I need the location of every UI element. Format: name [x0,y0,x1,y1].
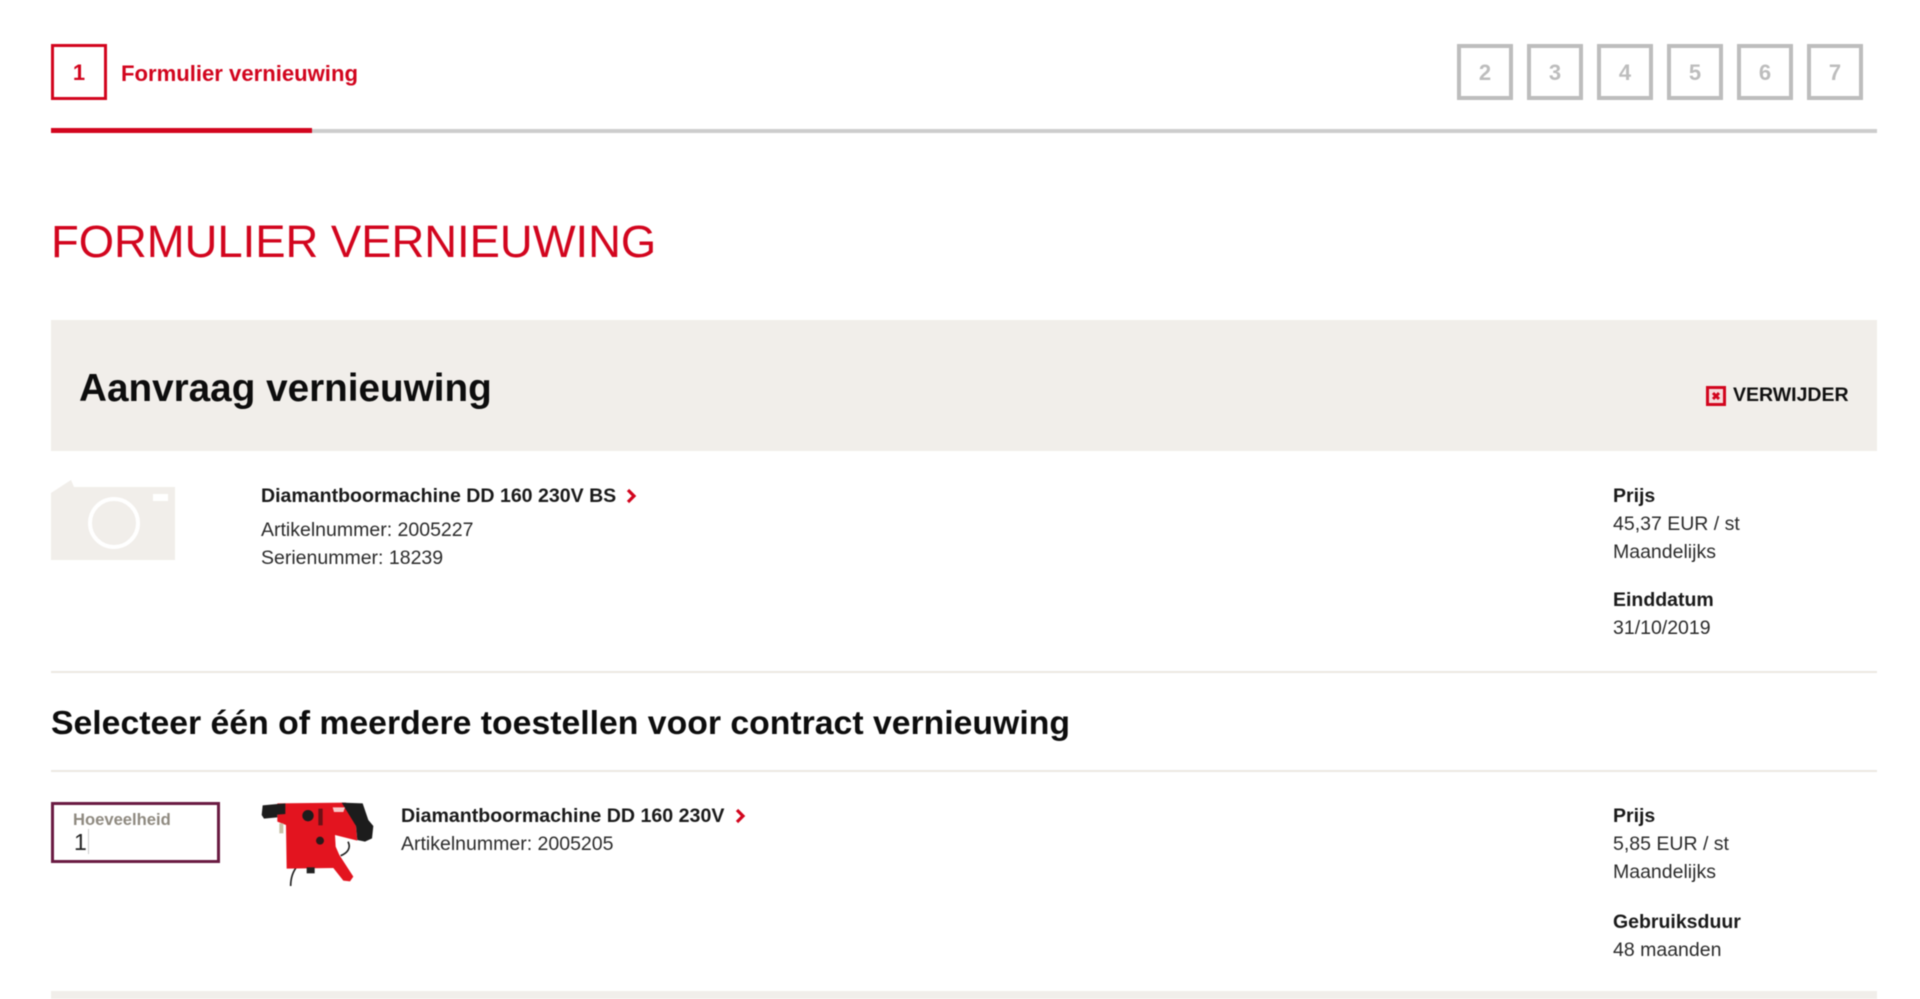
price label: Prijs [1613,805,1655,827]
progress track [51,129,1877,133]
page title: FORMULIER VERNIEUWING [51,216,656,267]
logo [333,807,345,812]
icon: chevron [735,808,746,824]
step 6 [1737,44,1793,100]
active step box [51,44,107,100]
usage period value: 48 maanden [1613,939,1721,961]
quantity label: Hoeveelheid [73,810,171,829]
end date value: 31/10/2019 [1613,617,1711,639]
price label: Prijs [1613,485,1655,507]
product 1 name: Diamantboormachine DD 160 230V BS [261,485,616,507]
usage period label: Gebruiksduur [1613,911,1741,933]
screw [316,837,324,845]
step 2: 2 [1479,60,1491,85]
remove label: VERWIJDER [1733,384,1849,406]
step 3 [1527,44,1583,100]
progress fill [51,128,312,133]
quantity input [51,802,220,863]
chuck [262,803,285,819]
step 4 [1597,44,1653,100]
band heading: Aanvraag vernieuwing [79,367,492,410]
next panel band [51,991,1877,999]
side clamp [279,823,283,833]
progress header [50,43,1878,134]
product 1 article number: Artikelnummer: 2005227 [261,519,473,541]
step 5: 5 [1689,60,1701,85]
product 1 details [260,485,637,569]
active step label: Formulier vernieuwing [121,61,358,86]
red body [277,803,357,881]
drill product image [260,802,374,887]
step 5 [1667,44,1723,100]
lower cable [291,866,297,886]
product 2 price block [1612,805,1742,961]
step 2 [1457,44,1513,100]
price frequency: Maandelijks [1613,861,1716,883]
end date label: Einddatum [1613,589,1714,611]
text caret [88,829,89,854]
step 3: 3 [1549,60,1561,85]
knob [302,810,314,821]
section heading: Selecteer één of meerdere toestellen voor contract vernieuwing [51,704,1070,742]
step 7 [1807,44,1863,100]
step 7: 7 [1829,60,1841,85]
panel: request header band [51,320,1877,451]
step 4: 4 [1619,60,1631,85]
price frequency: Maandelijks [1613,541,1716,563]
product 1 price block [1612,485,1740,639]
quantity value: 1 [74,829,87,855]
icon: camera placeholder [51,480,175,560]
icon: chevron [626,488,637,504]
product 2 article number: Artikelnummer: 2005205 [401,833,613,855]
slots [318,809,323,825]
foot [307,867,315,873]
rear housing [342,803,373,842]
product 2 name: Diamantboormachine DD 160 230V [401,805,724,827]
step 6: 6 [1759,60,1771,85]
power cable [341,842,349,856]
active step box: 1 [73,60,85,85]
product 1 serial number: Serienummer: 18239 [261,547,443,569]
price value: 5,85 EUR / st [1613,833,1729,855]
price value: 45,37 EUR / st [1613,513,1740,535]
icon: remove [1705,385,1727,407]
product 2 details [400,805,746,855]
